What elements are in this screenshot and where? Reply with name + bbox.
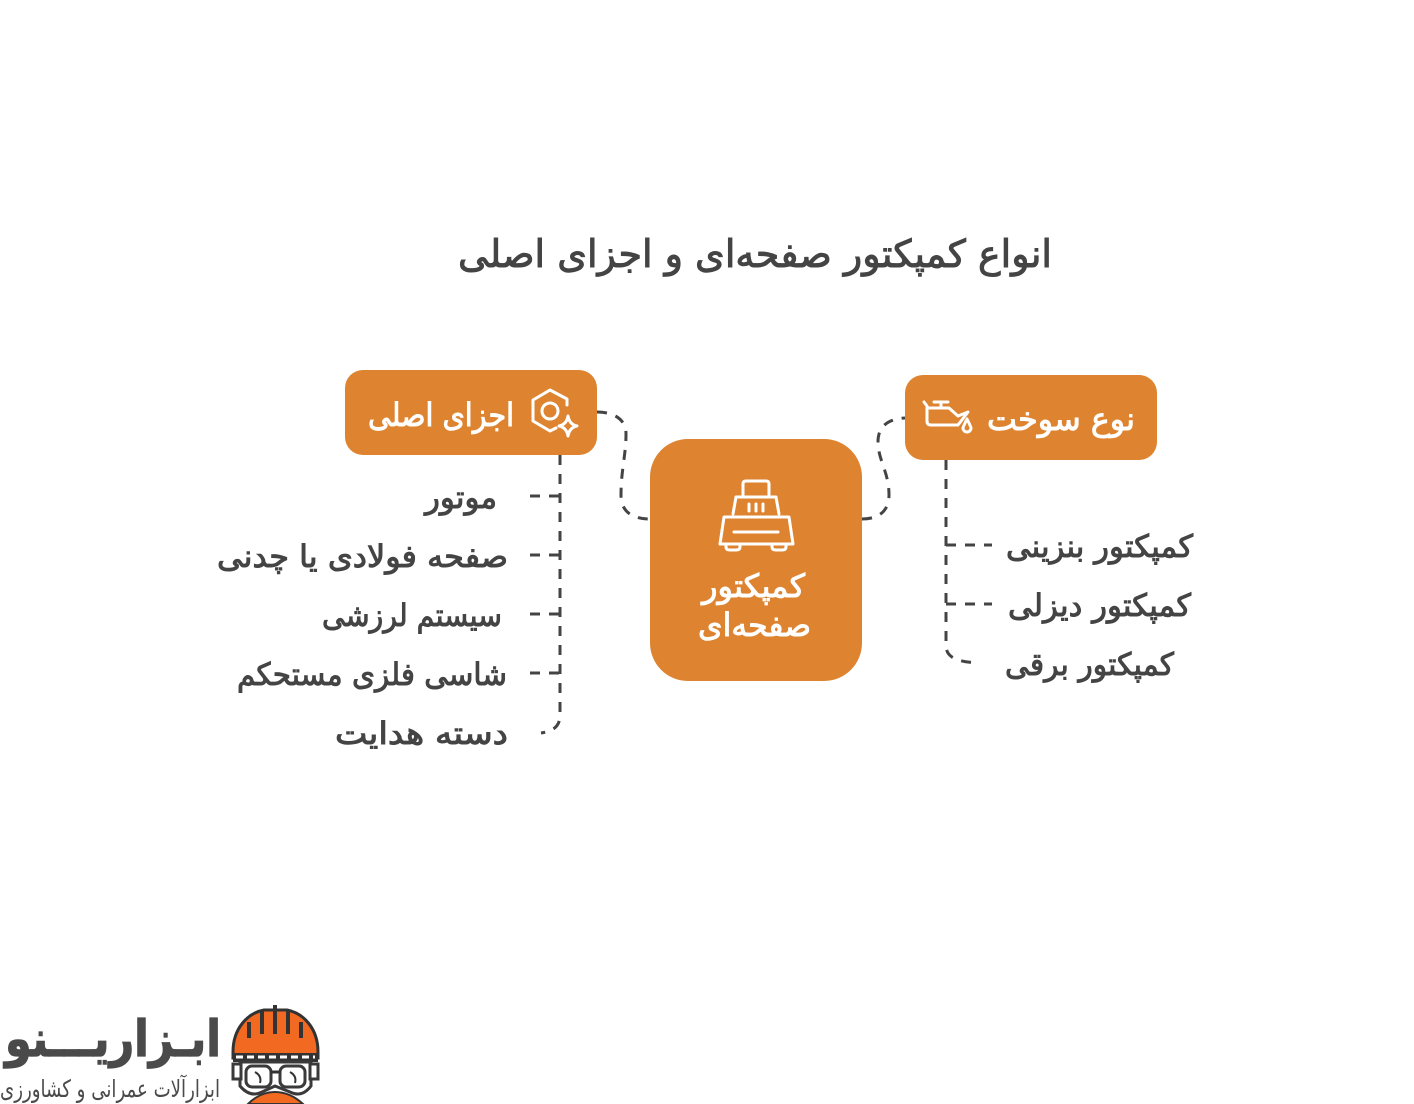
- list: fuel types: [1005, 529, 1193, 683]
- icon: oil can: [924, 402, 971, 432]
- logo wordmark: ابـزاریـــنو: [2, 1010, 221, 1069]
- list: main parts: موتور: [423, 480, 497, 516]
- connector: center to fuel type: [862, 418, 905, 519]
- list: main parts: دسته هدایت: [335, 716, 508, 752]
- panel: fuel type: [905, 375, 1157, 460]
- list: fuel types: کمپکتور بنزینی: [1006, 529, 1193, 565]
- connector: main parts list: [530, 455, 560, 733]
- heading: plate compactor: [698, 567, 811, 644]
- list: main parts: صفحه فولادی یا چدنی: [217, 539, 508, 575]
- icon: plate compactor: [720, 481, 793, 550]
- list: fuel types: کمپکتور دیزلی: [1008, 588, 1191, 624]
- list: main parts: شاسی فلزی مستحکم: [237, 657, 507, 693]
- panel: main parts: [345, 370, 597, 455]
- list: fuel types: کمپکتور برقی: [1005, 647, 1174, 683]
- connector: center to main parts: [597, 412, 650, 519]
- list: main parts: [217, 480, 508, 752]
- panel: central plate compactor: [650, 439, 862, 681]
- logo: [0, 1005, 318, 1104]
- icon: hex nut with sparkle: [533, 390, 577, 436]
- title: انواع کمپکتور صفحه‌ای و اجزای اصلی: [458, 232, 1052, 277]
- icon: helmet mascot: [233, 1005, 318, 1104]
- heading: fuel type: نوع سوخت: [987, 400, 1135, 438]
- heading: plate compactor: صفحه‌ای: [698, 606, 811, 644]
- heading: main parts: اجزای اصلی: [368, 396, 514, 434]
- connector: fuel type list: [946, 460, 992, 663]
- logo tagline: ابزارآلات عمرانی و کشاورزی: [0, 1074, 220, 1103]
- list: main parts: سیستم لرزشی: [322, 598, 502, 634]
- heading: plate compactor: کمپکتور: [700, 567, 806, 605]
